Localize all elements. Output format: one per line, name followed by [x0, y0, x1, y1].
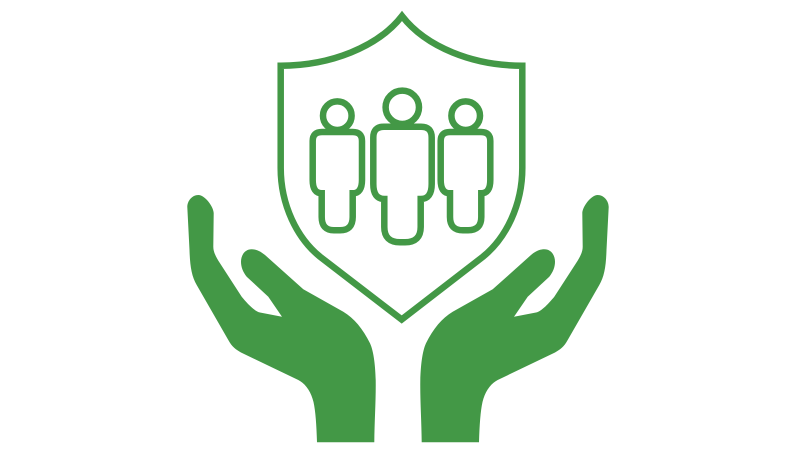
icon: shield — [281, 16, 522, 320]
icon: centre person — [373, 91, 432, 242]
icon: left hand — [187, 195, 376, 442]
icon: left person — [313, 101, 362, 230]
icon: right hand — [420, 195, 609, 442]
icon: right person — [441, 101, 490, 230]
